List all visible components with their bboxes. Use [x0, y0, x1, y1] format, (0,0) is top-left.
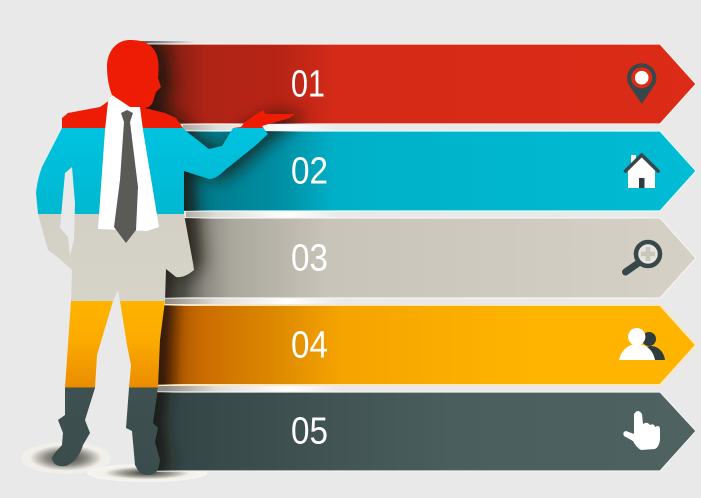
top shadow behind head: [140, 41, 195, 44]
icon: magnifier: [626, 242, 660, 272]
bar 04: [150, 305, 696, 385]
figure shadow cast on bars: [146, 44, 310, 471]
necktie: [114, 110, 138, 243]
separators between bars: [158, 124, 340, 392]
number 05: 05: [291, 410, 328, 452]
floor shadow: right foot: [87, 464, 207, 482]
bar 05: [150, 392, 696, 471]
body colour bands: [36, 40, 295, 475]
floor shadow: left foot: [21, 442, 111, 474]
number 03: 03: [291, 238, 328, 280]
bar 03: [160, 218, 696, 298]
bar 02: [170, 131, 696, 211]
icon: pointing hand: [623, 411, 660, 450]
icon: map pin: [627, 63, 656, 104]
number 04: 04: [291, 324, 328, 366]
bar 01: [140, 44, 696, 124]
number 01: 01: [291, 64, 325, 106]
businessman silhouette: [36, 40, 295, 475]
icon: people: [619, 328, 665, 360]
icon: house: [626, 155, 658, 188]
white shirt: [98, 95, 159, 231]
number 02: 02: [291, 150, 328, 192]
